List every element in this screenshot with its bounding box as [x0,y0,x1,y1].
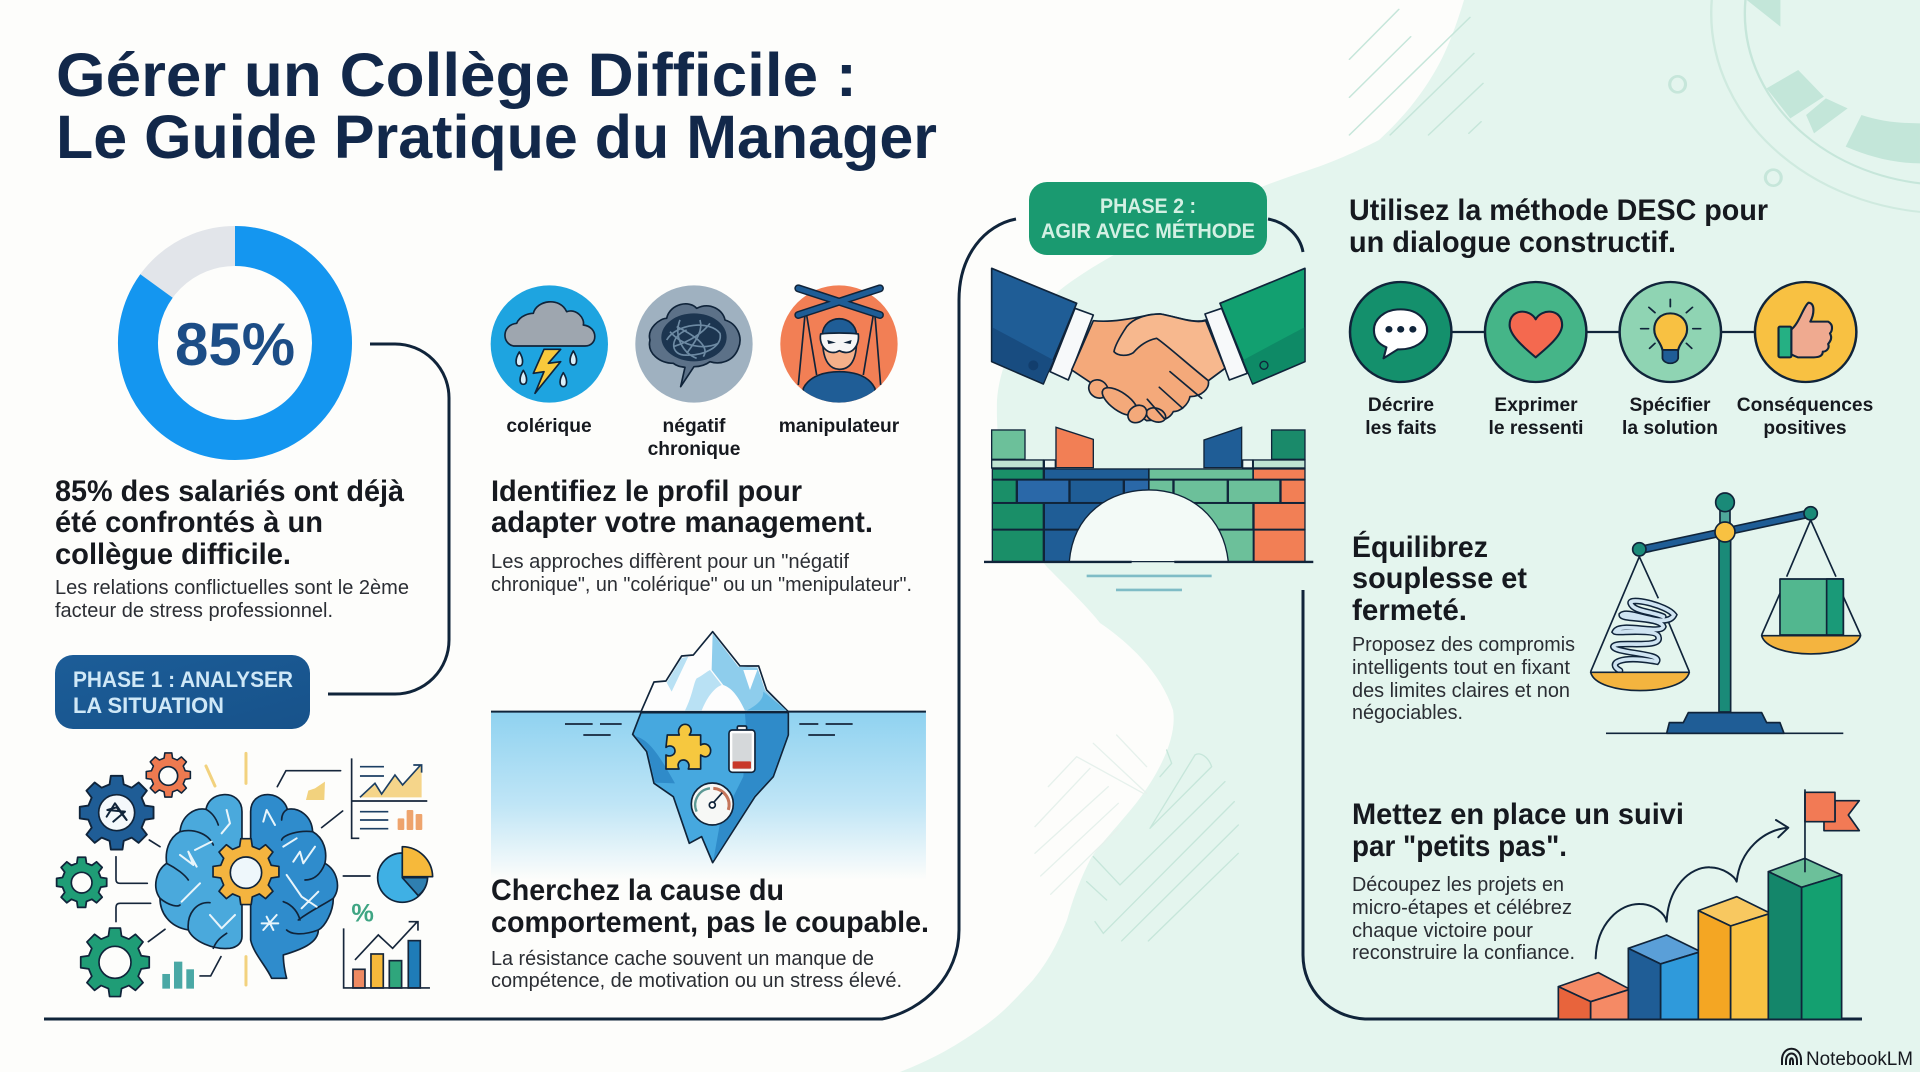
text block: identify profile: Les approches diffèrent pour un "négatif [491,551,849,573]
text block: small steps: par "petits pas". [1352,830,1567,863]
step D: speech bubble [1350,282,1451,382]
step C: thumbs up [1755,282,1856,382]
text block: small steps: Mettez en place un suivi [1352,798,1684,831]
DESC labels: Exprimer [1494,395,1578,416]
DESC labels: le ressenti [1489,418,1583,439]
text block: root cause: Cherchez la cause du [491,874,784,907]
scale stand [1606,493,1843,733]
icon: stress gauge [691,783,733,825]
icon: low battery [729,726,755,772]
text block: root cause: comportement, pas le coupable. [491,906,929,939]
text block: identify profile: adapter votre management. [491,506,873,539]
phase 1 badge: PHASE 1 : ANALYSER [73,667,293,692]
profile icons [491,285,898,407]
bar 3 [1698,897,1771,1019]
ripples [565,724,853,735]
chart: bars with percent: % [351,900,374,928]
text block: balance: négociables. [1352,702,1463,724]
phase 2 badge: AGIR AVEC MÉTHODE [1041,220,1255,243]
title: Gérer un Collège Difficile : [56,41,857,109]
icon: gears [57,753,190,997]
text block: statistic: Les relations conflictuelles sont le 2ème [55,577,409,599]
icon: storm cloud [491,285,608,403]
iceberg above water [641,632,788,712]
text block: root cause: compétence, de motivation ou un stress élevé. [491,970,902,992]
DESC labels: Spécifier [1629,395,1711,416]
flow line: left bottom and middle column [44,219,1016,1019]
icon: puzzle piece [666,724,711,769]
text block: root cause: La résistance cache souvent un manque de [491,948,874,970]
decoration: top right rings and hatching [1349,0,1920,213]
decoration: centre hatching [1035,735,1238,941]
title [56,41,937,171]
phase 2 badge [1029,182,1267,255]
right pan with block [1762,520,1861,654]
text block: small steps: micro-étapes et célébrez [1352,897,1572,919]
text block: statistic: facteur de stress professionnel. [55,600,333,622]
chart: pie [378,847,433,902]
phase 1 badge [55,655,310,729]
illustration: iceberg [491,632,926,880]
profile labels: manipulateur [779,416,900,437]
icon: central gear [213,839,279,905]
DESC labels [1365,395,1873,439]
iceberg below water [633,713,788,863]
text block: small steps [1352,798,1684,964]
arrows [1596,820,1788,958]
text block: statistic: 85% des salariés ont déjà [55,475,405,508]
text block: statistic: collègue difficile. [55,538,291,571]
DESC steps chain [1350,282,1856,382]
illustration: balance scale [1591,493,1861,733]
text block: balance: Équilibrez [1352,530,1488,564]
profile labels: négatif [663,416,726,437]
text block: identify profile [491,475,912,596]
text block: balance [1352,530,1575,724]
profile labels: chronique [648,439,741,460]
phase 1 badge: LA SITUATION [73,693,224,718]
icon: bridge [992,427,1305,562]
text block: identify profile: Identifiez le profil pour [491,475,803,508]
icon: masked manipulator puppet [780,285,898,407]
text block: identify profile: chronique", un "colérique" ou un "menipulateur". [491,574,912,596]
chart: bars with percent [344,900,430,988]
bridge ground and water [984,562,1313,590]
left pan with spring [1591,557,1689,691]
DESC labels: les faits [1365,418,1437,439]
text block: statistic [55,475,409,622]
waterline [491,709,926,715]
bar 1 [1558,973,1630,1019]
donut chart 85% [138,246,332,440]
NotebookLM mark: NotebookLM [1806,1049,1913,1070]
icon: brain [156,795,337,978]
chart: small bars and area [162,758,427,989]
text block: small steps: chaque victoire pour [1352,920,1533,942]
illustration: handshake and bridge [984,268,1313,590]
profile labels [506,416,900,460]
DESC labels: positives [1763,418,1847,439]
background mint blob [900,0,1920,1072]
phase 2 badge: PHASE 2 : [1100,195,1196,218]
flow line: right column and base [1303,590,1862,1019]
text block: balance: Proposez des compromis [1352,634,1575,656]
step E: heart [1485,282,1586,382]
text block: balance: intelligents tout en fixant [1352,657,1570,679]
DESC labels: Décrire [1368,395,1434,416]
rays and connectors [116,753,370,985]
scale beam [1633,507,1817,556]
illustration: rising stairs with flag [1558,790,1859,1019]
bar 2 [1628,935,1701,1019]
icon: flag [1805,790,1859,872]
flow line: right of phase 2 [1268,219,1303,252]
title: Le Guide Pratique du Manager [56,103,937,171]
water [491,712,926,880]
text block: small steps: Découpez les projets en [1352,874,1564,896]
text block: balance: fermeté. [1352,594,1467,627]
donut chart 85%: 85% [175,311,295,378]
text block: statistic: été confrontés à un [55,506,323,539]
text block: root cause [491,874,929,992]
illustration: brain and gears [57,753,433,997]
icon: tangled thought [635,285,753,403]
text block: balance: des limites claires et non [1352,680,1570,702]
DESC labels: la solution [1622,418,1718,439]
profile labels: colérique [506,416,592,437]
text block: small steps: reconstruire la confiance. [1352,942,1575,964]
step S: light bulb [1620,282,1721,382]
bar 4 [1768,858,1842,1019]
text block: balance: souplesse et [1352,562,1527,595]
DESC labels: Conséquences [1737,395,1873,416]
heading: DESC method [1349,194,1769,259]
flow line: phase 1 connector [328,344,449,694]
icon: handshake [992,268,1305,426]
heading: DESC method: Utilisez la méthode DESC pour [1349,194,1769,227]
heading: DESC method: un dialogue constructif. [1349,226,1676,259]
